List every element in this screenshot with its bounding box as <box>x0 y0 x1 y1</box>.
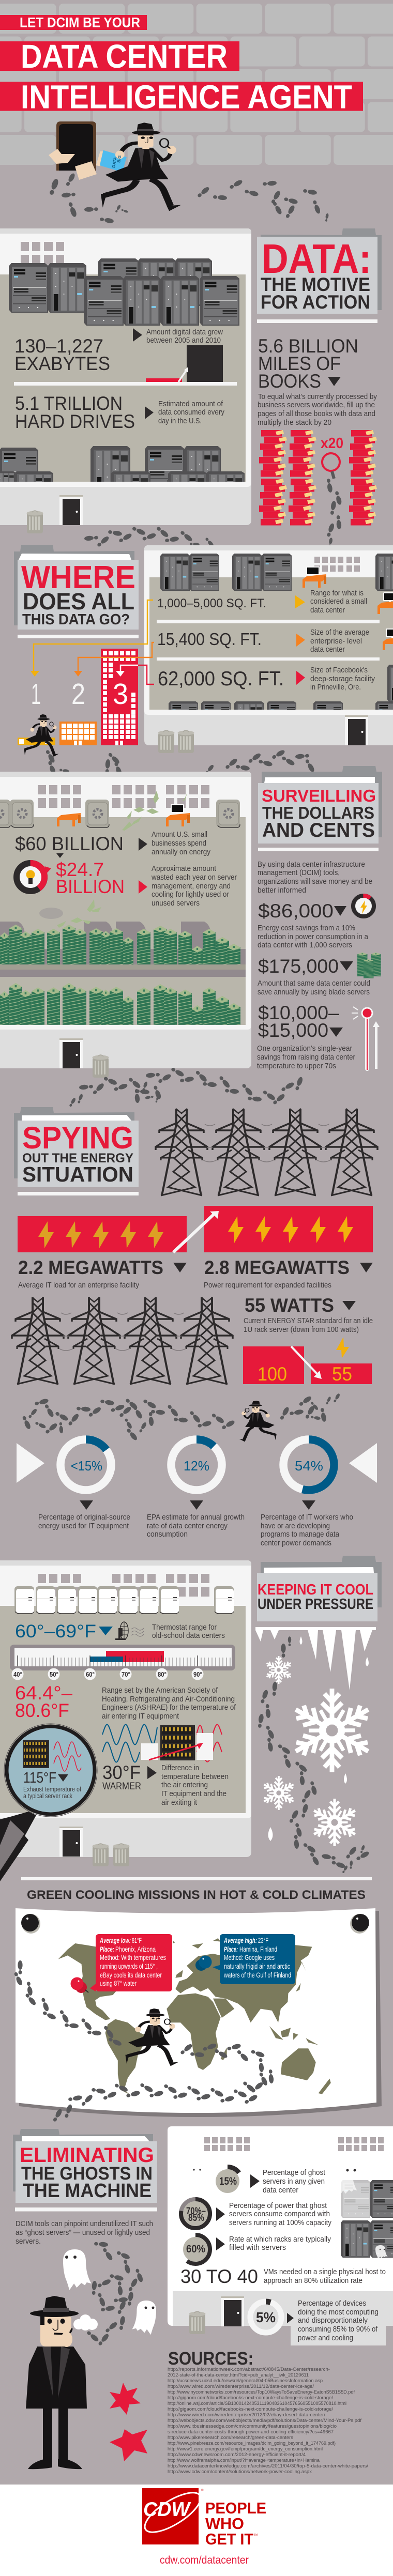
title block: INTELLIGENCE AGENT <box>21 79 352 116</box>
magnifier: 115 F exhaust callout: a typical server rack <box>23 1792 72 1800</box>
chart: temperature range scale: 60° <box>86 1670 95 1678</box>
buildings 1 2 3 with connector arrows: 1 <box>31 678 41 711</box>
panel: data center building 3 <box>0 772 251 1068</box>
chart: money stacks rows <box>0 925 240 1025</box>
sources list: http://ucsdnews.ucsd.edu/newsrel/general/04-05BusinessInformation.asp <box>168 2378 323 2384</box>
text: donut captions: programs to manage data <box>261 1530 340 1539</box>
stat: 130-1,227 exabytes: EXABYTES <box>14 353 110 374</box>
folder heading: Spying out the energy situation: SITUATION <box>22 1162 133 1186</box>
stat: 15% ghost servers: servers in any given <box>263 2178 325 2186</box>
icon: book stacks x20 <box>259 430 377 525</box>
stat: 60-69 F thermostat: 60°–69°F <box>15 1621 96 1642</box>
stat: 64.4-80.6 F ASHRAE: air entering IT equipment <box>102 1712 179 1721</box>
callout: Hamina: 23°F <box>258 1936 268 1944</box>
panel: data center building 5 <box>168 2126 393 2326</box>
sources list: http://reports.informationweek.com/abstract/6/8845/Data-Center/research- <box>168 2367 330 2372</box>
sources list: http://www.wired.com/wiredenterprise/2011/12/data-center-ice-age/ <box>168 2384 314 2389</box>
folder heading: Data the motive for action <box>257 228 382 323</box>
footprints: trail to surveillance section <box>45 749 315 776</box>
text: ghost servers intro: DCIM tools can pinpoint underutilized IT such <box>16 2220 153 2228</box>
hero agent with Big Data book <box>96 122 181 211</box>
sources list: http://www.cdw.com/content/solutions/network-power-cooling.aspx <box>168 2469 312 2475</box>
stat: 64.4-80.6 F ASHRAE: Range set by the American Society of <box>102 1686 218 1695</box>
stat: 60-69 F thermostat: Thermostat range for <box>152 1623 217 1632</box>
stat: 5.6 billion miles of books: MILES OF <box>258 353 341 374</box>
brick wall backdrop <box>0 4 393 165</box>
stat: 70-85% power: 85% <box>188 2213 204 2224</box>
stat: 15% ghost servers: 15% <box>219 2175 237 2187</box>
chart: 2.2 and 2.8 megawatts: Power requirement for expanded facilities <box>204 1281 331 1290</box>
folder heading: Where does all this data go: THIS DATA GO? <box>22 611 130 628</box>
callout: Phoenix: Method: With temperatures <box>100 1953 166 1961</box>
callout: Hamina: Average high: <box>223 1936 257 1944</box>
heading: green cooling missions: GREEN COOLING MISSIONS IN HOT & COLD CLIMATES <box>27 1888 366 1902</box>
icon: icicles <box>255 1627 376 1841</box>
chart: temperature range scale: 80° <box>158 1670 167 1678</box>
text: DCIM intro: By using data center infrastructure <box>258 861 365 869</box>
title block: LET DCIM BE YOUR <box>20 15 140 30</box>
stat: $24.7 billion: Approximate amount <box>152 865 216 873</box>
stat: $24.7 billion <box>56 859 237 908</box>
stat: 1,000-5,000 sq ft: data center <box>310 606 345 615</box>
stat: 62,000 sq ft: 62,000 SQ. FT. <box>158 668 284 690</box>
folder heading: Data the motive for action: THE MOTIVE <box>261 274 370 295</box>
chart: temperature range scale: 50° <box>50 1670 58 1678</box>
sources list: http://gigaom.com/cloud/facebooks-next-compute-challenge-is-cold-storage/ <box>168 2395 333 2401</box>
stat: $60 billion <box>15 831 211 858</box>
stat: $24.7 billion: management, energy and <box>152 882 231 891</box>
stat: 62,000 sq ft <box>158 666 375 692</box>
stat: 5% devices: power and cooling <box>298 2334 353 2342</box>
sources list: SOURCES: <box>168 2349 253 2369</box>
icon: door and trash can <box>27 495 83 533</box>
title block: DATA CENTER <box>21 38 228 75</box>
chart: 2.2 and 2.8 megawatts <box>18 1206 373 1290</box>
stat: 5% devices: consuming 85% to 90% of <box>298 2325 378 2334</box>
folder heading: Spying out the energy situation <box>14 1107 139 1195</box>
folder heading: Surveilling the dollars and cents <box>258 766 382 851</box>
stat: $86,000 <box>258 896 374 949</box>
icon: faint ghosts in building <box>183 2164 388 2259</box>
sources list: http://www.pinebreeze.com/resource_images/dcim_going_beyond_it_174769.pdf) <box>168 2441 336 2446</box>
agent at buildings <box>24 714 59 757</box>
callout: Hamina: waters of the Gulf of Finland <box>223 1971 291 1979</box>
stat: 30 F warmer <box>102 1762 229 1807</box>
icon: white ghosts <box>63 2249 156 2335</box>
chart: 100 to 55 watts bars: 100 <box>258 1363 287 1385</box>
folder heading: Eliminating the ghosts in the machine: ELIMINATING <box>20 2144 154 2167</box>
stat: 5% devices <box>250 2291 386 2345</box>
icon: agent on map <box>125 2008 178 2066</box>
sources list: 2012-state-of-the-data-center.html?cid=pub_analyt__iwk_20120611 <box>168 2372 309 2378</box>
stat: 5.1 trillion hard drives: Estimated amount of <box>158 400 223 408</box>
stat: $86,000: reduction in power consumption in a <box>258 933 369 941</box>
callout: Phoenix: Average low: <box>99 1936 131 1944</box>
text: donut captions: energy used for IT equipment <box>38 1522 129 1530</box>
buildings 1 2 3 with connector arrows <box>18 600 154 745</box>
magnifier: 115 F exhaust callout: 115°F <box>23 1770 56 1786</box>
icon: pipe smoke cloud <box>73 2314 98 2330</box>
stat: 130-1,227 exabytes <box>14 328 223 374</box>
stat: 5% devices: 5% <box>256 2309 276 2325</box>
sources list: http://www.datacenterknowledge.com/archives/2011/04/30/top-5-data-center-white-papers/ <box>168 2463 368 2469</box>
folder heading: Surveilling the dollars and cents: THE DOLLARS <box>262 803 374 822</box>
stat: 60-69 F thermostat <box>15 1621 225 1642</box>
stat: $60 billion: businesses spend <box>152 839 206 848</box>
stat: $175,000 <box>258 953 381 996</box>
text: donut captions: Percentage of original-source <box>38 1513 130 1522</box>
stat: 62,000 sq ft: Size of Facebook's <box>310 666 368 674</box>
stat: 5.6 billion miles of books: business servers worldwide, fill up the <box>258 401 375 409</box>
sources list: http://online.wsj.com/article/SB10001424053111904836104576560551005570810.html <box>168 2401 346 2406</box>
stat: 30 F warmer: Difference in <box>161 1764 199 1772</box>
title block <box>0 15 363 116</box>
sources list <box>168 2349 368 2475</box>
text: donut captions: have or are developing <box>261 1522 330 1530</box>
stat: 55 watts: 55 WATTS <box>245 1295 334 1316</box>
stat: 5.6 billion miles of books: pages of all those books with data and <box>258 410 375 418</box>
stat: 30 F warmer: IT equipment and the <box>161 1790 226 1798</box>
stat: $10,000-$15,000: temperature to upper 70s <box>257 1062 336 1070</box>
stat: 5.6 billion miles of books <box>258 335 377 427</box>
chart: temperature range scale: 40° <box>13 1670 22 1678</box>
icon: black thumbtacks <box>21 1914 369 1934</box>
stat: 5.6 billion miles of books: BOOKS <box>258 371 321 392</box>
sources list: s-reduce-data-center-costs-through-power-and-cooling-efficiency/?cs=49667 <box>168 2429 334 2435</box>
world map poster <box>13 1908 382 2123</box>
stat: 5% devices: and disproportionately <box>298 2317 368 2325</box>
stat: $60 billion: $60 BILLION <box>15 833 124 854</box>
folder heading: Where does all this data go: DOES ALL <box>23 588 134 615</box>
stat: 64.4-80.6 F ASHRAE: 64.4°– <box>15 1682 72 1704</box>
text: donut captions: consumption <box>147 1530 188 1539</box>
sources list: http://www.pikeresearch.com/research/green-data-centers <box>168 2435 293 2441</box>
callout: Phoenix <box>90 1934 172 1991</box>
stat: 130-1,227 exabytes: Amount digital data grew <box>146 328 223 336</box>
footer: CDW logo: WHO <box>205 2514 244 2533</box>
stat: 15% ghost servers: data center <box>263 2186 298 2195</box>
stat: 15% ghost servers <box>213 2167 325 2196</box>
chart: percentage donuts: 12% <box>184 1458 209 1474</box>
stat: 30 to 40 VMs <box>180 2266 386 2287</box>
icon: door and trash cans 4 <box>59 1827 129 1866</box>
stat: $175,000: save annually by using blade servers <box>258 988 370 996</box>
stat: 55 watts <box>244 1295 373 1334</box>
stat: 15,400 sq ft: data center <box>310 646 345 654</box>
callout: Hamina <box>213 1934 295 1984</box>
stat: 5.6 billion miles of books: 5.6 BILLION <box>258 335 358 357</box>
chart: 2.2 and 2.8 megawatts: 2.2 MEGAWATTS <box>18 1257 163 1278</box>
folder heading: Surveilling the dollars and cents: SURVEILLING <box>262 786 376 805</box>
footer: CDW logo: PEOPLE <box>205 2499 266 2517</box>
chart: 100 to 55 watts bars: 55 <box>332 1363 352 1385</box>
icon: blue pin <box>195 1956 212 1971</box>
footprints: map trail <box>13 1960 274 2123</box>
folder heading: Spying out the energy situation: SPYING <box>22 1121 133 1155</box>
callout: Hamina: Hamina, Finland <box>239 1945 277 1953</box>
folder heading: Eliminating the ghosts in the machine: THE MACHINE <box>23 2180 152 2202</box>
folder heading: Keeping it cool under pressure <box>257 1556 382 1621</box>
stat: 15,400 sq ft: 15,400 SQ. FT. <box>157 630 262 649</box>
callout: Phoenix: using 87° water <box>100 1979 137 1987</box>
callout: Hamina: naturally frigid air and arctic <box>224 1962 290 1970</box>
stat: 55 watts: Current ENERGY STAR standard for an idle <box>244 1317 373 1325</box>
folder heading: Eliminating the ghosts in the machine: THE GHOSTS IN <box>21 2164 153 2184</box>
icon: running agent mirrored <box>239 1401 277 1442</box>
hero agent with Big Data book: DATA <box>111 157 118 168</box>
chart: temperature range scale: 90° <box>193 1670 202 1678</box>
icon: door and trash cans 2 <box>158 715 368 753</box>
chart: 100 to 55 watts bars <box>243 1337 372 1385</box>
icon: door and trash can 5 <box>189 2296 244 2334</box>
callout: Phoenix: Phoenix, Arizona <box>115 1945 156 1953</box>
stat: 30 F warmer: temperature between <box>161 1773 229 1781</box>
folder heading: Data the motive for action: DATA: <box>262 236 371 282</box>
stat: 64.4-80.6 F ASHRAE: Engineers (ASHRAE) for the temperature of <box>102 1704 236 1712</box>
footer: CDW logo <box>139 2486 266 2548</box>
hero agent with Big Data book: BIG <box>116 155 122 163</box>
callout: Hamina: Place: <box>224 1945 238 1953</box>
stat: 60% rack fill: Rate at which racks are typically <box>229 2235 331 2244</box>
chart: data growth bars <box>14 345 237 386</box>
stat: 5% devices: Percentage of devices <box>298 2299 366 2308</box>
text: DCIM intro: organizations will save money and be <box>258 878 372 886</box>
folder heading: Where does all this data go <box>14 545 139 638</box>
chart: 2.2 and 2.8 megawatts: Average IT load for an enterprise facility <box>18 1281 140 1290</box>
text: donut captions: center power demands <box>261 1539 331 1547</box>
panel: data center building 2 <box>144 545 393 745</box>
sources list: http://webobjects.cdw.com/webobjects/media/pdf/solutions/Data-center/Mind-Your-Ps.pdf <box>168 2418 361 2424</box>
stat: 30 F warmer: WARMER <box>102 1781 141 1792</box>
stat: 60% rack fill: filled with servers <box>229 2244 286 2252</box>
text: DCIM intro <box>258 861 372 895</box>
flying money bills <box>57 791 187 928</box>
footprints: entry trail <box>48 173 329 224</box>
stat: $10,000-$15,000: $10,000– <box>258 1002 339 1023</box>
large agent with pipe <box>26 2296 87 2469</box>
buildings 1 2 3 with connector arrows: 2 <box>71 678 85 711</box>
icon: book stacks x20: x20 <box>321 435 343 452</box>
chart: temperature range scale <box>10 1645 235 1680</box>
stat: 5% devices: doing the most computing <box>298 2308 379 2317</box>
stat: 70-85% power <box>181 2199 332 2228</box>
stat: 5.6 billion miles of books: To equal what's currently processed by <box>258 393 377 401</box>
stat: 30 F warmer: 30°F <box>102 1762 141 1783</box>
sources list: http://www.cdwnewsroom.com/2012-energy-efficient-it-report/4 <box>168 2452 306 2458</box>
footer: CDW logo: GET IT <box>205 2530 253 2548</box>
folder heading: Data the motive for action: FOR ACTION <box>261 292 370 313</box>
stat: 70-85% power: 70%– <box>186 2206 206 2217</box>
icon: thermometer with arrow <box>352 1007 380 1071</box>
footprints: ghost trail <box>86 2241 144 2347</box>
stat: 62,000 sq ft: in Prineville, Ore. <box>310 683 361 692</box>
buildings 1 2 3 with connector arrows: 3 <box>113 678 128 711</box>
text: donut captions: Percentage of IT workers who <box>261 1513 353 1522</box>
chart: temperature range scale: 70° <box>122 1670 130 1678</box>
stat: 5.1 trillion hard drives: HARD DRIVES <box>15 411 135 432</box>
magnifier: 115 F exhaust callout <box>0 1724 97 1881</box>
stat: $175,000: $175,000 <box>258 956 339 977</box>
folder heading: Where does all this data go: WHERE <box>21 560 135 595</box>
footer: URL: cdw.com/datacenter <box>160 2554 249 2566</box>
icon: door and trash can 3 <box>59 1038 109 1078</box>
sources list: http://www.nycomnetworks.com/resources/Top10WaysToSaveEnergy-EatonS5B1S5D.pdf <box>168 2389 355 2395</box>
sources list: http://gigaom.com/cloud/facebooks-next-compute-challenge-is-cold-storage/ <box>168 2406 333 2412</box>
stat: $10,000-$15,000: One organization's single-year <box>257 1045 352 1053</box>
callout: Phoenix: eBay cools its data center <box>100 1971 162 1979</box>
stat: 30 F warmer: air exiting it <box>161 1799 197 1807</box>
stat: $60 billion: Amount U.S. small <box>152 831 207 839</box>
stat: $86,000: Energy cost savings from a 10% <box>258 924 355 932</box>
stat: 70-85% power: servers consume compared with <box>229 2210 330 2218</box>
stat: $24.7 billion: unused servers <box>152 899 200 908</box>
stat: 1,000-5,000 sq ft: Range for what is <box>310 589 364 597</box>
stat: 30 F warmer: the air entering <box>161 1781 208 1789</box>
stat: 15% ghost servers: Percentage of ghost <box>263 2169 325 2177</box>
stat: 64.4-80.6 F ASHRAE: 80.6°F <box>15 1700 69 1721</box>
sources list: http://www1.eere.energy.gov/femp/program/dc_energy_consumption.html <box>168 2446 323 2452</box>
icon: red stars <box>110 2383 147 2461</box>
text: donut captions <box>38 1513 353 1547</box>
callout: Hamina: Method: Google uses <box>224 1953 275 1961</box>
footprints: snow trail <box>257 1636 370 1874</box>
stat: $60 billion: annually on energy <box>152 848 211 856</box>
text: ghost servers intro: as “ghost servers” — unused or lightly used <box>16 2229 150 2237</box>
text: DCIM intro: better informed <box>258 886 306 895</box>
icon: power pylons lower row <box>12 1297 233 1384</box>
stat: 64.4-80.6 F ASHRAE <box>15 1682 236 1721</box>
heading: green cooling missions <box>21 1877 372 1902</box>
stat: 5.6 billion miles of books: multiply the stack by 20 <box>258 419 331 427</box>
stat: 130-1,227 exabytes: 130–1,227 <box>14 335 103 357</box>
stat: $10,000-$15,000 <box>257 1002 355 1070</box>
stat: $86,000: $86,000 <box>258 900 334 922</box>
footer: CDW logo: CDW <box>143 2498 191 2521</box>
panel: data center building 1 <box>0 228 251 525</box>
footer: CDW logo: ® <box>201 2489 204 2492</box>
icon: red pin <box>70 1977 88 1993</box>
stat: 15,400 sq ft: enterprise- level <box>310 637 362 646</box>
text: ghost servers intro <box>16 2220 153 2246</box>
stat: $24.7 billion: wasted each year on server <box>151 873 237 882</box>
footprints: trail to where section <box>84 478 342 548</box>
text: DCIM intro: management (DCIM) tools, <box>258 869 340 877</box>
stat: 5.1 trillion hard drives: data consumed every <box>158 408 225 417</box>
stat: $24.7 billion: cooling for lightly used or <box>152 891 229 899</box>
map: continents <box>58 1938 331 2095</box>
footer: CDW logo: TM <box>254 2534 258 2537</box>
folder heading: Eliminating the ghosts in the machine <box>13 2129 157 2211</box>
stat: 1,000-5,000 sq ft: 1,000–5,000 SQ. FT. <box>157 596 266 610</box>
stat: 5.1 trillion hard drives: 5.1 TRILLION <box>15 393 123 414</box>
stat: 64.4-80.6 F ASHRAE: Heating, Refrigerating and Air-Conditioning <box>102 1695 235 1704</box>
icon: power pylons top row <box>156 1109 377 1195</box>
stat: 15,400 sq ft <box>157 628 380 661</box>
folder heading: Spying out the energy situation: OUT THE ENERGY <box>22 1151 133 1166</box>
stat: 60% rack fill <box>181 2235 331 2264</box>
stat: $86,000: data center with 1,000 servers <box>258 941 352 949</box>
stat: $24.7 billion: $24.7 <box>56 859 104 880</box>
chart: percentage donuts <box>17 1439 377 1510</box>
chart: percentage donuts: <15% <box>71 1458 102 1474</box>
stat: 60-69 F thermostat: old-school data centers <box>152 1632 225 1640</box>
folder heading: Keeping it cool under pressure: KEEPING IT COOL <box>258 1582 373 1598</box>
stat: 62,000 sq ft: deep-storage facility <box>310 675 375 683</box>
chart: percentage donuts: 54% <box>295 1458 323 1474</box>
stat: 70-85% power: Percentage of power that ghost <box>229 2202 327 2210</box>
stat: 30 to 40 VMs: approach an 80% utilization rate <box>264 2277 362 2285</box>
stat: 60% rack fill: 60% <box>186 2243 205 2255</box>
stat: 55 watts: 1U rack server (down from 100 watts) <box>244 1326 359 1334</box>
text: ghost servers intro: servers. <box>16 2237 41 2246</box>
icon: light bulb donut <box>17 863 51 891</box>
chart: 2.2 and 2.8 megawatts: 2.8 MEGAWATTS <box>204 1257 350 1278</box>
panel: data center building 4 <box>0 1560 251 1857</box>
stat: 70-85% power: servers running at 100% capacity <box>229 2219 332 2227</box>
stat: 5.1 trillion hard drives <box>15 393 225 432</box>
stat: 15,400 sq ft: Size of the average <box>310 628 369 637</box>
sources list: http://www.wolframalpha.com/input/?i=average+temperature+in+Hamina <box>168 2458 320 2463</box>
stat: 5.1 trillion hard drives: day in the U.S. <box>158 417 202 425</box>
icon: snowflakes <box>262 1656 373 1846</box>
stat: $175,000: Amount that same data center could <box>258 979 370 988</box>
folder heading: Surveilling the dollars and cents: AND CENTS <box>262 819 375 841</box>
footprints: trail to spying section <box>69 1067 304 1107</box>
stat: $10,000-$15,000: $15,000 <box>258 1020 328 1041</box>
stat: 30 to 40 VMs: 30 TO 40 <box>180 2266 258 2287</box>
callout: Phoenix: 81°F <box>132 1936 142 1944</box>
stat: 1,000-5,000 sq ft: considered a small <box>310 597 367 606</box>
sources list: http://www.itbusinessedge.com/cm/community/features/guestopinions/blog/cio <box>168 2424 337 2429</box>
callout: Phoenix: Place: <box>100 1945 114 1953</box>
stat: 1,000-5,000 sq ft <box>157 589 380 623</box>
icon: air flow through server <box>102 1724 222 1762</box>
magnifier: 115 F exhaust callout: Exhaust temperature of <box>23 1785 81 1793</box>
stat: 130-1,227 exabytes: between 2005 and 2010 <box>146 336 221 345</box>
stat: $10,000-$15,000: savings from raising data center <box>257 1053 355 1062</box>
sources list: http://www.wired.com/wiredenterprise/2012/02/ebay-desert-data-center/ <box>168 2412 325 2418</box>
stat: $24.7 billion: BILLION <box>56 876 125 897</box>
text: donut captions: EPA estimate for annual growth <box>147 1513 245 1522</box>
text: donut captions: rate of data center energy <box>147 1522 228 1530</box>
dark doorway with torn paper <box>49 121 97 180</box>
callout: Phoenix: running upwards of 115° , <box>100 1962 158 1970</box>
footprints: energy trail <box>21 1393 341 1442</box>
